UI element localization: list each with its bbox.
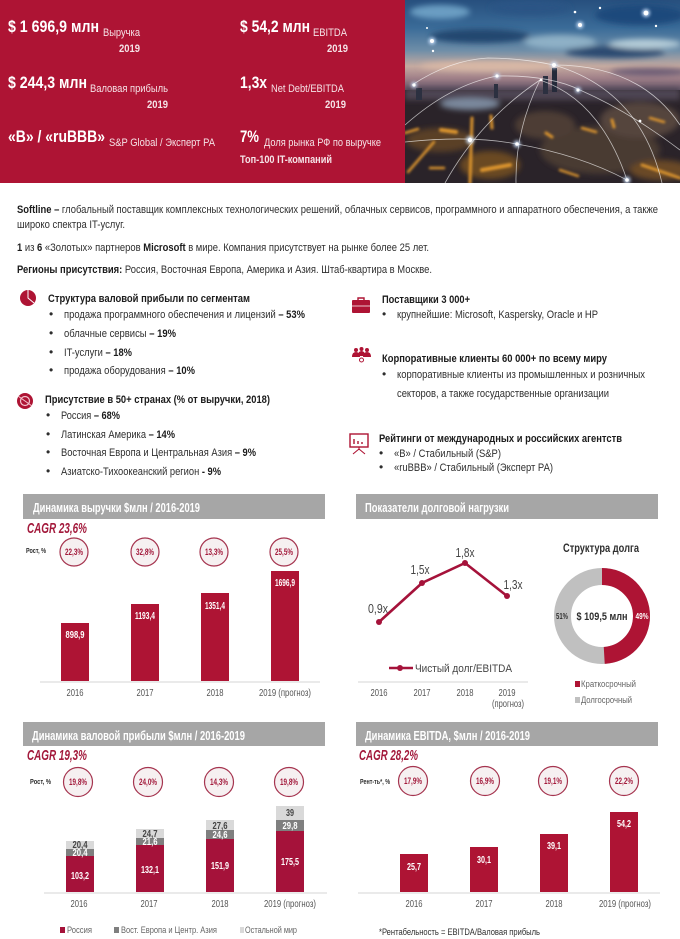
margin circles: 19,1%: [544, 776, 562, 786]
photo: night city with network lines: [405, 0, 680, 184]
metric: credit ratings: S&P Global / Эксперт РА: [109, 137, 216, 149]
line chart: net debt to EBITDA: Чистый долг/EBITDA: [415, 663, 513, 675]
bar chart: EBITDA: 2019 (прогноз): [599, 899, 651, 910]
section: gross profit structure: IT-услуги – 18%: [64, 347, 132, 359]
section: geographic presence: •: [46, 427, 50, 441]
bar chart: revenue: 2019 (прогноз): [259, 688, 311, 699]
metric: credit ratings: [8, 127, 216, 149]
section: corporate clients: Корпоративные клиенты 60 000+ по всему миру: [382, 353, 608, 365]
text block: company intro: Регионы присутствия: Россия, Восточная Европа, Америка и Азия. Штаб-квартира в Москве.: [17, 264, 432, 276]
bar chart: revenue: 898,9: [66, 630, 85, 641]
bar chart: EBITDA: 2018: [546, 899, 563, 910]
stacked bar chart: gross profit: 151,9: [211, 861, 229, 872]
bar chart: revenue: 2018: [206, 688, 224, 699]
section: geographic presence: Латинская Америка – 14%: [61, 429, 175, 441]
panel: debt load: Показатели долговой нагрузки: [365, 500, 509, 515]
growth rate circles: 19,8%: [280, 777, 298, 787]
icon: globe: [17, 393, 33, 409]
text block: company intro: широко спектра IT-услуг.: [17, 219, 125, 231]
stacked bar chart: gross profit: 2017: [140, 899, 158, 910]
section: gross profit structure: облачные сервисы – 19%: [64, 328, 176, 340]
section: corporate clients: секторов, а также государственные организации: [397, 388, 609, 400]
panel: EBITDA dynamics: Динамика EBITDA, $млн / 2016-2019: [365, 728, 530, 743]
panel: debt load: [356, 494, 658, 710]
donut chart: debt structure: 51%: [556, 611, 568, 621]
metric: gross profit: [8, 73, 168, 111]
bar chart: EBITDA: [358, 812, 660, 910]
metric: market share: Топ-100 IT-компаний: [240, 154, 332, 166]
panel: key metrics: [0, 0, 405, 183]
metric: net debt to EBITDA: Net Debt/EBITDA: [271, 83, 345, 95]
donut chart: debt structure: $ 109,5 млн: [576, 611, 628, 623]
panel: gross profit dynamics: Рост, %: [30, 779, 52, 786]
bar chart: EBITDA: 2016: [406, 899, 423, 910]
stacked bar chart: gross profit: 20,4: [72, 848, 88, 859]
section: geographic presence: [17, 393, 270, 478]
stacked bar chart: gross profit: 2016: [70, 899, 88, 910]
line chart: net debt to EBITDA: 2016: [370, 688, 388, 699]
section: geographic presence: •: [46, 464, 50, 478]
stacked bar chart: gross profit: 20,4: [72, 840, 88, 851]
growth rate circles: 24,0%: [139, 777, 157, 787]
growth rate circles: 13,3%: [205, 547, 223, 557]
margin circles: 16,9%: [476, 776, 494, 786]
line chart: net debt to EBITDA: (прогноз): [492, 699, 524, 710]
stacked bar chart: gross profit: 27,6: [212, 821, 228, 832]
section: ratings: •: [379, 446, 383, 460]
section: geographic presence: Россия – 68%: [61, 410, 120, 422]
metric: EBITDA: [240, 17, 348, 55]
donut chart: debt structure: 49%: [636, 611, 649, 621]
growth rate circles: 19,8%: [69, 777, 87, 787]
section: gross profit structure: •: [49, 345, 53, 359]
line chart: net debt to EBITDA: 2017: [414, 688, 431, 699]
section: gross profit structure: [20, 290, 305, 377]
icon: pie chart: [20, 290, 36, 306]
bar chart: revenue: 2017: [136, 688, 154, 699]
bar chart: EBITDA: 39,1: [547, 841, 561, 852]
stacked bar chart: gross profit: 39: [286, 808, 294, 819]
panel: gross profit dynamics: Динамика валовой прибыли $млн / 2016-2019: [32, 728, 245, 743]
stacked bar chart: gross profit: 103,2: [71, 871, 89, 882]
donut chart: debt structure: [556, 541, 649, 705]
panel: gross profit dynamics: [23, 722, 327, 935]
section: suppliers: крупнейшие: Microsoft, Kaspersky, Oracle и HP: [397, 309, 598, 321]
metric: revenue: Выручка: [103, 27, 141, 39]
section: geographic presence: Азиатско-Тихоокеанский регион - 9%: [61, 466, 221, 478]
panel: EBITDA dynamics: [356, 722, 660, 937]
bar chart: EBITDA: 54,2: [617, 819, 631, 830]
panel: EBITDA dynamics: CAGR 28,2%: [359, 747, 418, 764]
bar chart: EBITDA: 25,7: [407, 862, 421, 873]
donut chart: debt structure: Краткосрочный: [581, 679, 636, 689]
section: geographic presence: •: [46, 408, 50, 422]
stacked bar chart: gross profit: 2019 (прогноз): [264, 899, 316, 910]
stacked bar chart: gross profit: 132,1: [141, 865, 159, 876]
bar chart: EBITDA: 2017: [476, 899, 493, 910]
metric: revenue: [8, 17, 141, 55]
bar chart: revenue: 1351,4: [205, 601, 225, 612]
panel: revenue dynamics: Динамика выручки $млн / 2016-2019: [33, 500, 200, 515]
growth rate circles: 22,3%: [65, 547, 83, 557]
metric: market share: 7%: [240, 127, 259, 146]
bar chart: revenue: [40, 571, 320, 699]
metric: EBITDA: 2019: [327, 43, 348, 55]
metric: net debt to EBITDA: 1,3x: [240, 73, 267, 92]
metric: net debt to EBITDA: [240, 73, 346, 111]
line chart: net debt to EBITDA: 1,3x: [504, 577, 523, 592]
stacked bar chart: gross profit: 2018: [212, 899, 229, 910]
section: geographic presence: Присутствие в 50+ странах (% от выручки, 2018): [45, 394, 270, 406]
icon: briefcase: [352, 298, 370, 313]
section: gross profit structure: Структура валовой прибыли по сегментам: [48, 293, 250, 305]
bar chart: revenue: 2016: [66, 688, 84, 699]
metric: market share: Доля рынка РФ по выручке: [264, 137, 381, 149]
panel: revenue dynamics: Рост, %: [26, 548, 47, 555]
chart legend: Вост. Европа и Центр. Азия: [121, 925, 217, 935]
metric: market share: [240, 127, 381, 166]
donut chart: debt structure: Долгосрочный: [581, 695, 632, 705]
margin circles: 22,2%: [615, 776, 633, 786]
section: ratings: Рейтинги от международных и российских агентств: [379, 433, 622, 445]
metric: gross profit: $ 244,3 млн: [8, 73, 87, 92]
section: gross profit structure: продажа оборудования – 10%: [64, 365, 195, 377]
line chart: net debt to EBITDA: 0,9x: [368, 601, 388, 616]
metric: net debt to EBITDA: 2019: [325, 99, 346, 111]
footnote: *Рентабельность = EBITDA/Валовая прибыль: [379, 927, 540, 937]
bar chart: EBITDA: 30,1: [477, 855, 491, 866]
panel: revenue dynamics: CAGR 23,6%: [27, 520, 87, 537]
section: suppliers: [352, 294, 598, 321]
section: corporate clients: корпоративные клиенты из промышленных и розничных: [397, 369, 645, 381]
icon: people: [352, 347, 371, 362]
icon: presentation board: [350, 434, 368, 454]
growth rate circles: 25,5%: [275, 547, 293, 557]
stacked bar chart: gross profit: 29,8: [282, 821, 298, 832]
metric: revenue: $ 1 696,9 млн: [8, 17, 99, 36]
growth rate circles: [60, 538, 298, 566]
text block: company intro: 1 из 6 «Золотых» партнеров Microsoft в мире. Компания присутствует на рынке более 25 лет.: [17, 242, 429, 254]
growth rate circles: 32,8%: [136, 547, 154, 557]
text block: company intro: [17, 204, 658, 276]
section: ratings: «ruBBB» / Стабильный (Эксперт РА): [394, 462, 553, 474]
section: ratings: [350, 433, 622, 474]
panel: revenue dynamics: [23, 494, 325, 699]
bar chart: revenue: 1696,9: [275, 578, 295, 589]
panel: gross profit dynamics: CAGR 19,3%: [27, 747, 87, 764]
stacked bar chart: gross profit: 21,6: [142, 837, 158, 848]
growth rate circles: 14,3%: [210, 777, 228, 787]
metric: gross profit: 2019: [147, 99, 168, 111]
margin circles: [398, 766, 638, 796]
metric: gross profit: Валовая прибыль: [90, 83, 168, 95]
section: ratings: «B» / Стабильный (S&P): [394, 448, 501, 460]
section: corporate clients: [352, 347, 645, 400]
section: geographic presence: Восточная Европа и Центральная Азия – 9%: [61, 447, 256, 459]
stacked bar chart: gross profit: 24,7: [142, 829, 158, 840]
section: gross profit structure: •: [49, 326, 53, 340]
section: suppliers: Поставщики 3 000+: [382, 294, 470, 306]
line chart: net debt to EBITDA: 1,5x: [410, 562, 430, 577]
metric: EBITDA: $ 54,2 млн: [240, 17, 310, 36]
stacked bar chart: gross profit: 175,5: [281, 857, 299, 868]
chart legend: Россия: [67, 925, 92, 935]
donut chart: debt structure: Структура долга: [563, 541, 639, 555]
section: gross profit structure: продажа программного обеспечения и лицензий – 53%: [64, 309, 305, 321]
margin circles: 17,9%: [404, 776, 422, 786]
chart legend: Остальной мир: [245, 925, 297, 935]
section: corporate clients: •: [382, 367, 386, 381]
stacked bar chart: gross profit: 24,6: [212, 830, 228, 841]
section: gross profit structure: •: [49, 307, 53, 321]
metric: EBITDA: EBITDA: [313, 27, 348, 39]
metric: revenue: 2019: [119, 43, 140, 55]
section: suppliers: •: [382, 307, 386, 321]
stacked bar chart: gross profit: [44, 806, 327, 910]
chart legend: [60, 925, 297, 935]
line chart: net debt to EBITDA: 2019: [498, 688, 516, 699]
section: ratings: •: [379, 460, 383, 474]
line chart: net debt to EBITDA: 2018: [456, 688, 474, 699]
line chart: net debt to EBITDA: 1,8x: [456, 545, 475, 560]
growth rate circles: [64, 768, 304, 796]
line chart: net debt to EBITDA: [358, 545, 528, 710]
bar chart: revenue: 1193,4: [135, 611, 155, 622]
metric: credit ratings: «B» / «ruBBB»: [8, 127, 105, 146]
section: gross profit structure: •: [49, 363, 53, 377]
panel: EBITDA dynamics: Рент-ть*, %: [360, 779, 391, 786]
section: geographic presence: •: [46, 445, 50, 459]
